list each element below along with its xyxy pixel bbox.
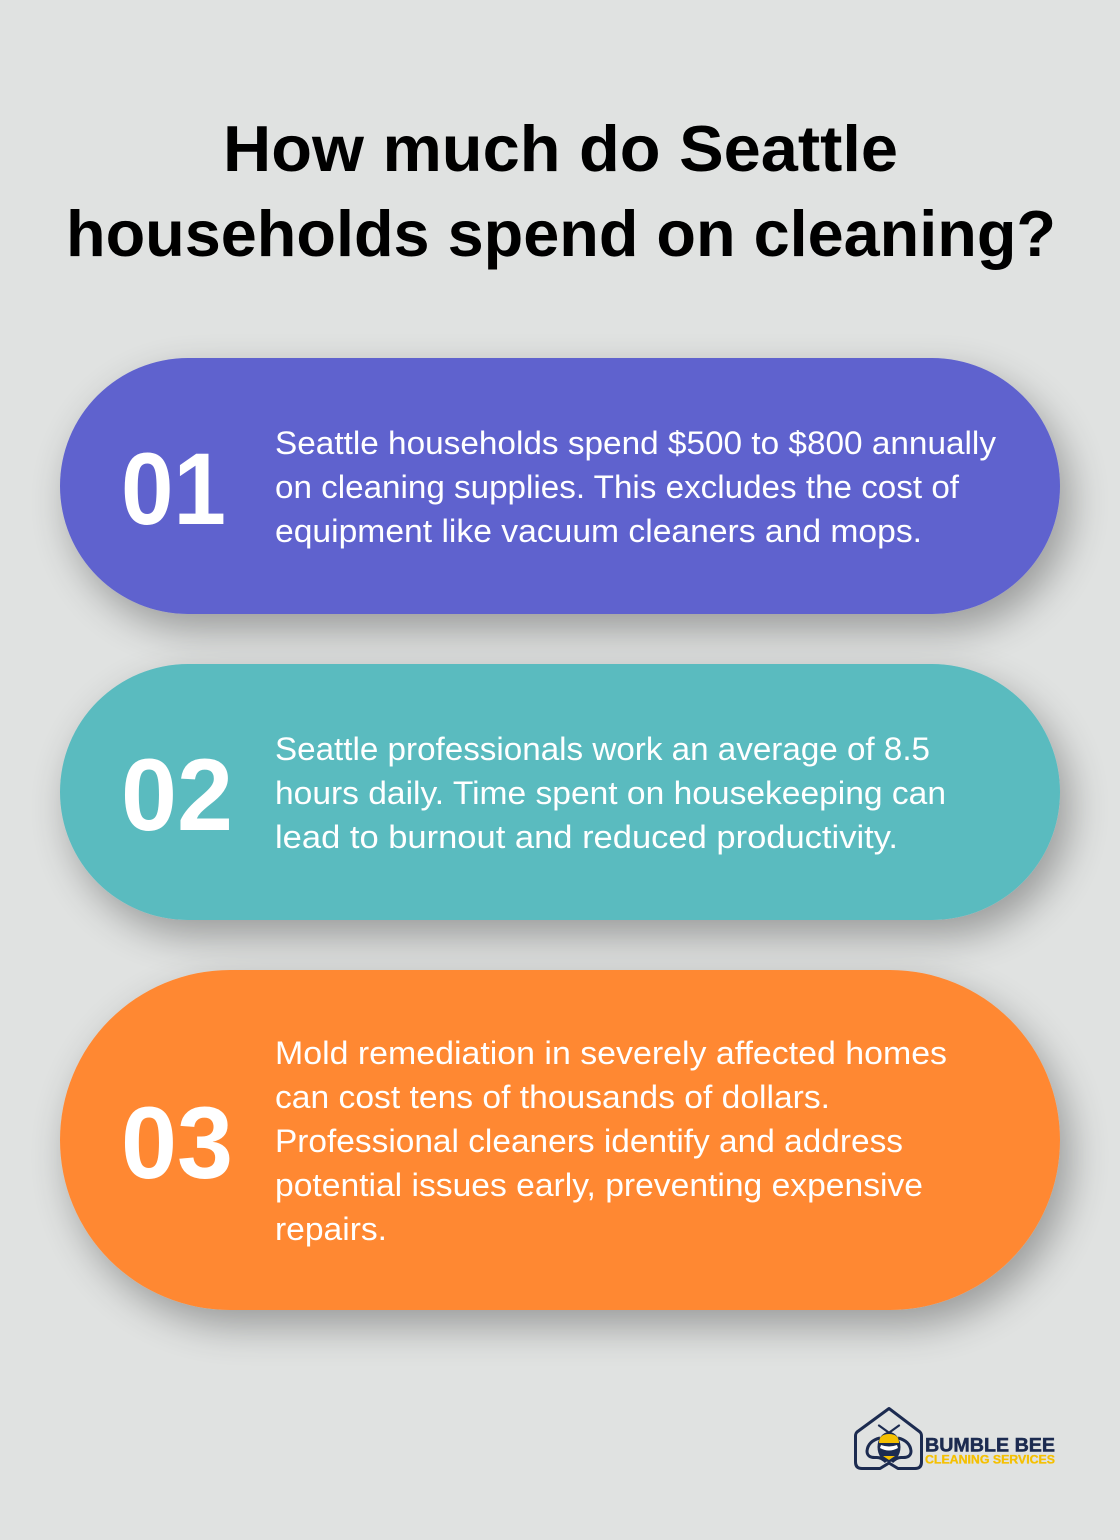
text block 03: Professional cleaners identify and address: [275, 1123, 903, 1159]
number 03: 03: [121, 1086, 233, 1200]
text block 01: [275, 425, 996, 549]
title: [66, 112, 1056, 270]
text block 03: potential issues early, preventing expensive: [275, 1167, 923, 1203]
card background 02: [60, 664, 1060, 920]
title: households spend on cleaning?: [66, 197, 1056, 270]
logo: Bumble Bee Cleaning Services: [856, 1408, 1055, 1468]
text block 01: on cleaning supplies. This excludes the cost of: [275, 469, 959, 505]
text block 02: Seattle professionals work an average of 8.5: [275, 731, 930, 767]
text block 02: lead to burnout and reduced productivity.: [275, 819, 898, 855]
icon: bee: [867, 1426, 911, 1462]
number 02: 02: [121, 738, 233, 852]
text block 03: [275, 1035, 947, 1247]
text block 03: repairs.: [275, 1211, 387, 1247]
text block 01: equipment like vacuum cleaners and mops.: [275, 513, 922, 549]
title: How much do Seattle: [223, 112, 898, 185]
logo tagline: CLEANING SERVICES: [925, 1454, 1055, 1466]
panel: step 01: [60, 358, 1060, 614]
text block 03: can cost tens of thousands of dollars.: [275, 1079, 830, 1115]
panel: step 02: [60, 664, 1060, 920]
card background 03: [60, 970, 1060, 1310]
text block 02: [275, 731, 946, 855]
text block 01: Seattle households spend $500 to $800 annually: [275, 425, 996, 461]
icon: house outline: [856, 1408, 922, 1468]
text block 03: Mold remediation in severely affected homes: [275, 1035, 947, 1071]
text block 02: hours daily. Time spent on housekeeping can: [275, 775, 946, 811]
logo wordmark: BUMBLE BEE: [925, 1434, 1055, 1456]
panel: step 03: [60, 970, 1060, 1310]
number 01: 01: [121, 432, 226, 546]
card background 01: [60, 358, 1060, 614]
